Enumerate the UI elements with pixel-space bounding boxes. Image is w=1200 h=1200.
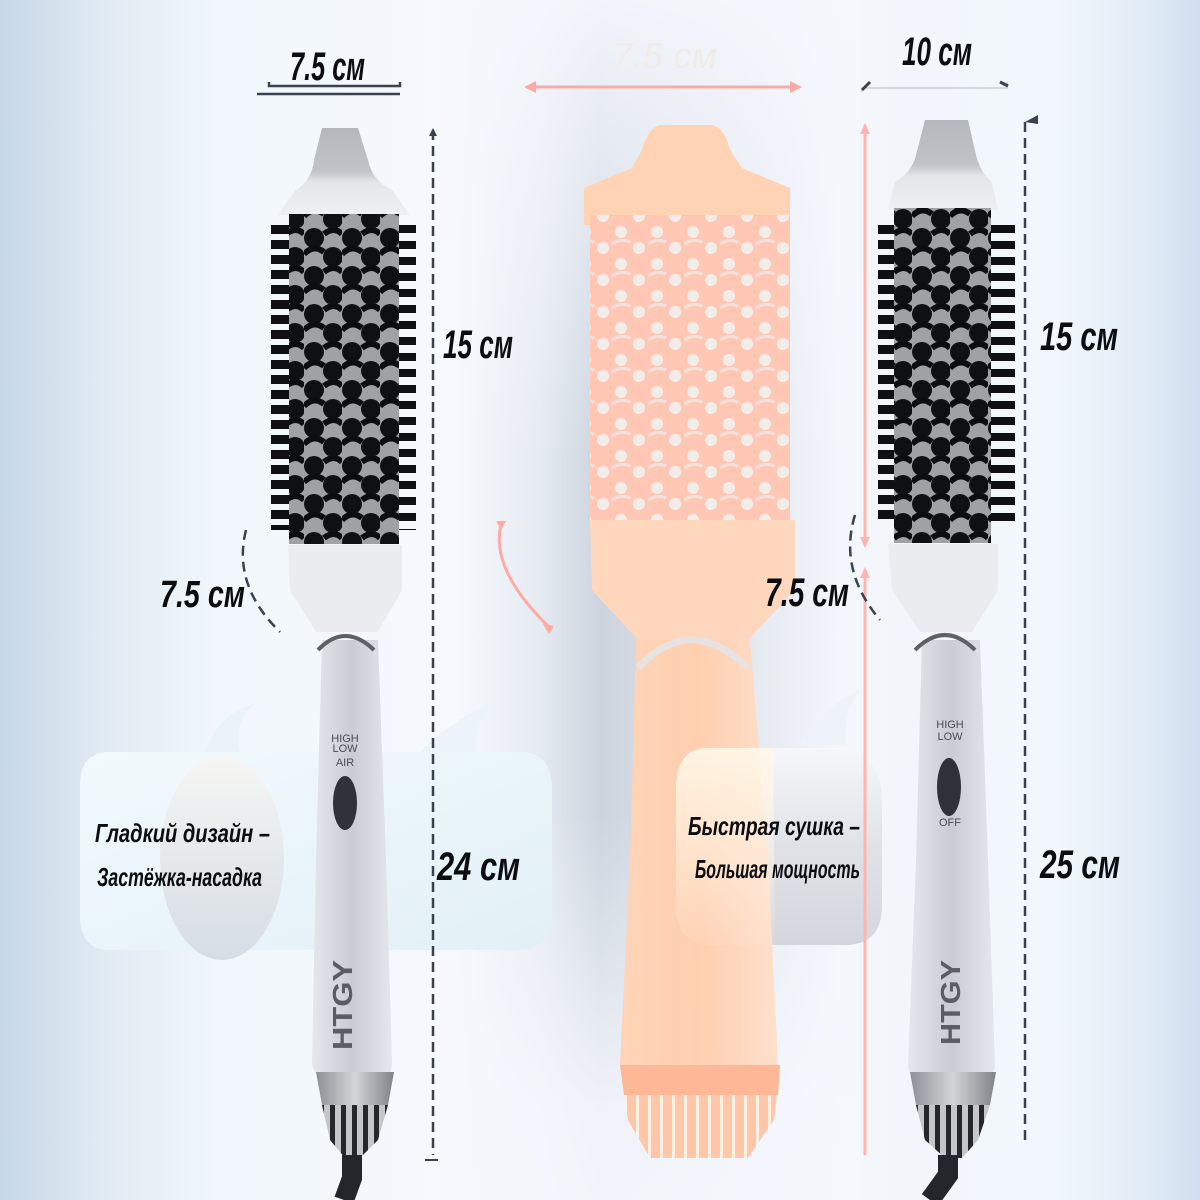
switch labels: OFF [939,817,961,829]
callout text: left: Гладкий дизайн – [95,818,270,848]
product: left brush [278,128,410,1200]
power cord [344,1155,352,1200]
dimension: right dashed arc [850,515,880,620]
cap [888,120,998,210]
panel: right callout bubble, tint over handle [676,748,775,945]
dimension: left dashed height [425,128,438,1160]
dimension label: handle length right: 25 см [1039,843,1120,887]
brand mark: HTGY [327,960,358,1050]
side bristles right [985,225,1015,525]
collar [590,520,795,640]
collar [888,544,998,632]
barrel [590,215,790,520]
handle [908,640,995,1075]
dimension label: right diameter: 7.5 см [765,571,849,615]
callout text: right: Большая мощность [695,854,860,884]
switch labels: AIR [336,757,354,769]
barrel [289,214,399,544]
base vent [916,1105,990,1158]
neck ring [638,640,748,668]
dimension: right pink height [860,123,870,1155]
switch labels: HIGH [331,733,359,745]
dimension: top-right width bracket [862,82,1008,92]
dimension: left dashed arc [243,530,280,632]
cap [584,125,790,225]
product: centre brush, peach [584,125,795,1158]
neck ring [915,635,975,650]
handle [312,640,392,1075]
dimension label: handle length left: 24 см [436,845,520,889]
side bristles left [271,225,303,530]
switch labels: LOW [937,731,963,743]
panel: left callout bubble [80,702,552,960]
base vent [322,1105,388,1158]
power cord [930,1155,948,1200]
cap [278,128,410,215]
collar [288,545,402,632]
switch labels: HIGH [936,719,964,731]
callout text: left: Застёжка-насадка [97,862,262,892]
dimension label: left diameter: 7.5 см [160,574,245,616]
side bristles left [878,225,908,525]
brand mark: HTGY [935,960,966,1045]
switch labels: LOW [332,743,358,755]
neck ring [318,636,374,650]
dimension label: barrel length left: 15 см [443,323,513,367]
product: right brush [888,120,1000,1200]
base [620,1065,780,1158]
dimension label: top-right width: 10 см [902,30,972,74]
base band [910,1072,996,1105]
dimension: centre pink width arrow [524,81,802,93]
dimension: centre pink arc [496,521,554,634]
barrel [894,208,991,543]
base band [316,1072,394,1105]
dimension label: top-left width: 7.5 см [290,45,365,89]
switch [937,758,961,816]
callout text: right: Быстрая сушка – [688,811,860,841]
dimension label: centre width, faint: 7.5 см [612,35,717,76]
dimension: right dashed height [1025,115,1038,1145]
callout orb [160,756,284,960]
handle [620,640,778,1065]
dimension label: barrel length right: 15 см [1040,315,1118,359]
side bristles right [386,225,416,530]
switch [333,776,357,830]
panel: right callout bubble, back layer [676,690,882,945]
dimension: top-left width bracket [257,82,400,94]
